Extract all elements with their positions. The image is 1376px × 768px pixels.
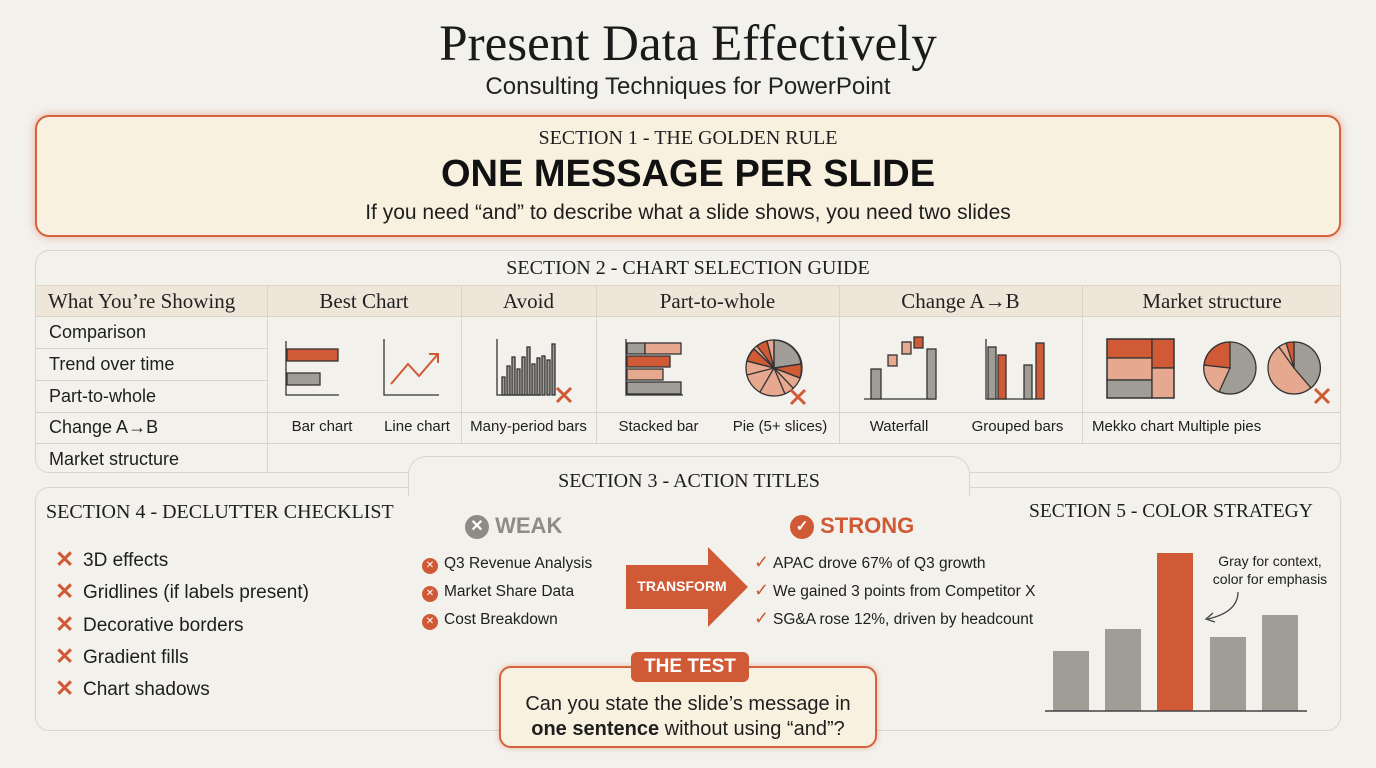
test question xyxy=(525,693,851,740)
weak heading: WEAK xyxy=(495,513,562,538)
icon: line chart xyxy=(384,339,439,395)
chart labels row: Mekko chart Multiple pies xyxy=(1092,418,1261,435)
row labels: Market structure xyxy=(49,449,179,469)
panel: bottom sections xyxy=(35,487,1341,731)
test question: one sentence without using “and”? xyxy=(531,718,845,740)
weak list xyxy=(422,555,592,630)
icon: bar chart xyxy=(286,341,339,395)
weak list: Cost Breakdown xyxy=(444,611,558,628)
strong list xyxy=(754,552,1036,628)
test badge: THE TEST xyxy=(644,656,736,677)
checklist items: Decorative borders xyxy=(83,615,244,636)
section 4 heading: SECTION 4 - DECLUTTER CHECKLIST xyxy=(46,501,394,523)
section 2 heading: SECTION 2 - CHART SELECTION GUIDE xyxy=(506,257,870,279)
chart labels row: Bar chart xyxy=(292,418,352,435)
icon: many-period bars xyxy=(497,339,571,402)
row labels: Part-to-whole xyxy=(49,386,156,406)
checklist items: ✕ xyxy=(55,578,74,604)
row labels: Trend over time xyxy=(49,354,174,374)
chart labels row: Stacked bar xyxy=(618,418,699,435)
checklist items xyxy=(55,546,309,701)
checklist items: ✕ xyxy=(55,675,74,701)
title: Present Data Effectively xyxy=(439,16,937,72)
chart labels row: Many-period bars xyxy=(470,418,587,435)
checklist items: ✕ xyxy=(55,546,74,572)
icon: stacked bar xyxy=(626,339,683,395)
section 5 heading: SECTION 5 - COLOR STRATEGY xyxy=(1029,501,1313,522)
table header row: What You’re Showing xyxy=(48,289,235,313)
weak list: ✕ xyxy=(426,560,434,571)
row labels xyxy=(49,322,179,469)
strong list: ✓ xyxy=(754,552,769,572)
chart labels row: Grouped bars xyxy=(972,418,1063,435)
table header row: Best Chart xyxy=(319,289,409,313)
section 1 heading: SECTION 1 - THE GOLDEN RULE xyxy=(538,127,838,149)
strong list: SG&A rose 12%, driven by headcount xyxy=(773,611,1033,628)
table header row: Avoid xyxy=(503,289,554,313)
chart icons xyxy=(285,336,1330,405)
checklist items: ✕ xyxy=(55,611,74,637)
icon: pie 5+ slices xyxy=(746,340,805,404)
table header row: Market structure xyxy=(1142,289,1282,313)
icon: grouped bars xyxy=(986,339,1044,399)
main message: ONE MESSAGE PER SLIDE xyxy=(441,153,935,195)
annotation: Gray for context, color for emphasis xyxy=(1213,553,1327,587)
explanation: If you need “and” to describe what a slide shows, you need two slides xyxy=(365,201,1011,224)
strong list: APAC drove 67% of Q3 growth xyxy=(773,555,986,572)
section 3 tab xyxy=(408,456,970,496)
subtitle: Consulting Techniques for PowerPoint xyxy=(485,73,891,100)
checklist items: ✕ xyxy=(55,643,74,669)
callout: the test xyxy=(499,666,877,748)
chart labels row: Line chart xyxy=(384,418,450,435)
chart labels row: Waterfall xyxy=(870,418,928,435)
checklist items: 3D effects xyxy=(83,550,168,571)
table header row: Change A→B xyxy=(901,289,1020,313)
icon: multiple pies xyxy=(1204,342,1329,403)
icon: waterfall xyxy=(864,337,936,399)
chart labels row xyxy=(292,418,1261,435)
weak list: ✕ xyxy=(426,616,434,627)
checklist items: Gradient fills xyxy=(83,647,189,668)
strong heading: STRONG xyxy=(820,513,914,538)
panel: section 4 declutter checklist xyxy=(46,501,394,701)
row labels: Change A→B xyxy=(49,417,158,437)
strong titles xyxy=(754,513,1036,628)
chart labels row: Pie (5+ slices) xyxy=(733,418,827,435)
panel: section 2 chart selection guide xyxy=(35,250,1341,473)
table header row: Part-to-whole xyxy=(660,289,775,313)
panel: section 5 color strategy xyxy=(1029,501,1327,712)
checklist items: Gridlines (if labels present) xyxy=(83,582,309,603)
checklist items: Chart shadows xyxy=(83,679,210,700)
weak list: Q3 Revenue Analysis xyxy=(444,555,592,572)
panel: section 1 golden rule xyxy=(35,115,1341,237)
test badge xyxy=(631,652,749,682)
section 3 heading: SECTION 3 - ACTION TITLES xyxy=(558,470,820,492)
weak list: ✕ xyxy=(426,588,434,599)
strong list: ✓ xyxy=(754,608,769,628)
table header row xyxy=(48,289,1282,313)
strong heading: ✓ xyxy=(796,518,808,535)
arrow: transform: TRANSFORM xyxy=(637,578,727,594)
weak heading xyxy=(465,513,562,539)
row labels: Comparison xyxy=(49,322,146,342)
strong list: We gained 3 points from Competitor X xyxy=(773,583,1035,600)
arrow: transform xyxy=(626,547,748,627)
weak heading: ✕ xyxy=(470,518,484,535)
test question: Can you state the slide’s message in xyxy=(525,693,851,715)
strong list: ✓ xyxy=(754,580,769,600)
bar chart xyxy=(1045,553,1307,712)
weak titles xyxy=(422,513,592,630)
weak list: Market Share Data xyxy=(444,583,574,600)
icon: mekko chart xyxy=(1107,339,1174,398)
